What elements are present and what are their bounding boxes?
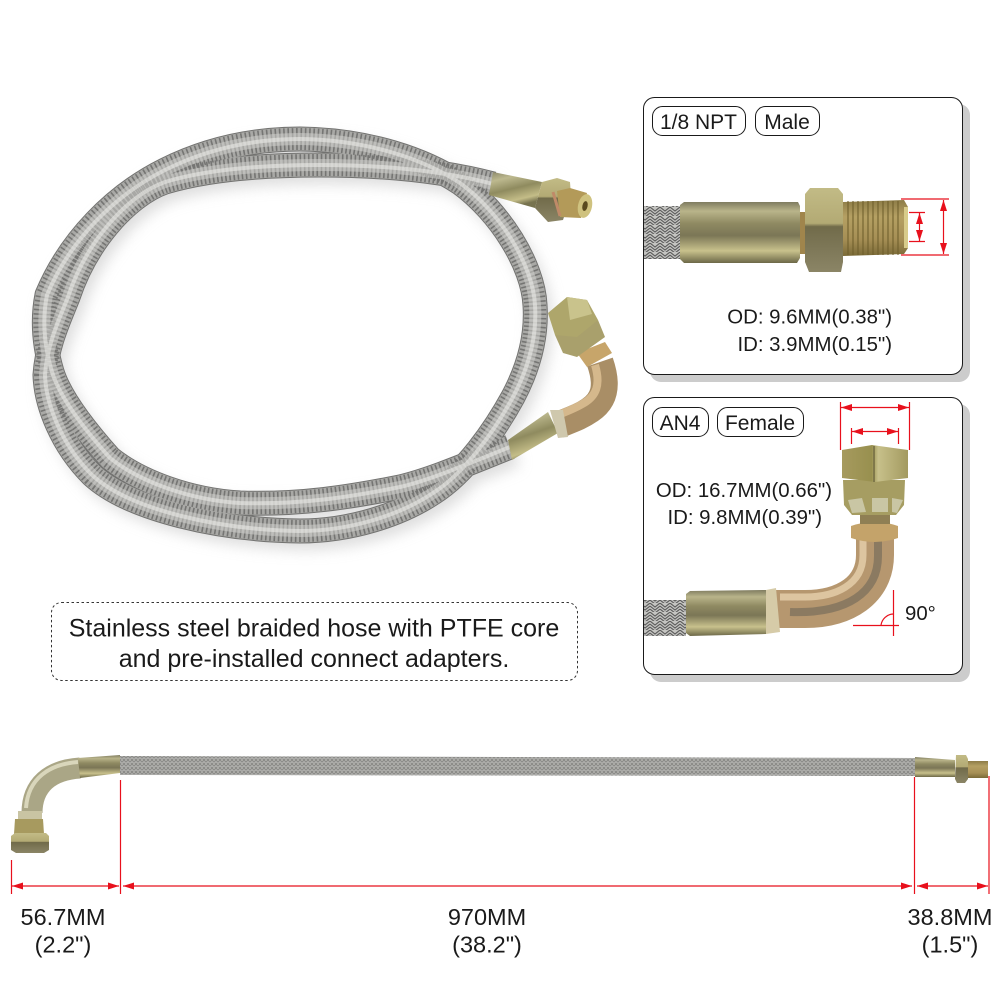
label: hose length: (38.2"): [452, 932, 522, 958]
tag: 1/8 NPT: [652, 106, 746, 136]
label: 90 degrees: 90°: [905, 603, 936, 625]
female elbow fitting photo: [644, 445, 908, 636]
panel shadow: [650, 404, 970, 682]
product photo: coiled braided hose: [44, 139, 612, 539]
panel frame: [644, 398, 962, 674]
tag: 1/8 NPT: 1/8 NPT: [660, 111, 737, 134]
dimension lines: overall length: [12, 776, 989, 894]
label: hose length: [448, 904, 526, 958]
left elbow and nut: [11, 755, 120, 853]
full-length hose photo: [11, 755, 988, 853]
label: hose length: 970MM: [448, 904, 526, 930]
tag: Female: [718, 408, 804, 436]
spec text: female: OD: 16.7MM(0.66"): [656, 480, 832, 502]
panel frame: [644, 98, 962, 374]
callout: product description: and pre-installed connect adapters.: [119, 645, 509, 673]
label: right fitting length: (1.5"): [922, 932, 978, 958]
tag: Male: Male: [764, 111, 810, 134]
tag: Male: [756, 106, 820, 136]
callout: product description: Stainless steel braided hose with PTFE core: [69, 614, 559, 642]
male fitting on coil: [489, 172, 594, 222]
panel shadow: [650, 104, 970, 382]
spec text: female: [656, 480, 832, 529]
right male fitting: [915, 755, 988, 783]
male fitting photo: [644, 188, 908, 272]
label: left fitting length: [21, 904, 105, 958]
hose coil: [44, 139, 535, 531]
label: right fitting length: [908, 904, 992, 958]
panel: female connector: [644, 398, 970, 682]
spec text: female: ID: 9.8MM(0.39"): [667, 507, 822, 529]
label: left fitting length: (2.2"): [35, 932, 91, 958]
label: right fitting length: 38.8MM: [908, 904, 992, 930]
tag: AN4: [652, 408, 708, 436]
spec text: male: [727, 306, 892, 356]
dimension arrows: male: [901, 199, 949, 255]
dimension arrows: female: [840, 402, 910, 636]
label: left fitting length: 56.7MM: [21, 904, 105, 930]
braided hose: [120, 756, 915, 776]
elbow fitting on coil: [508, 297, 612, 460]
panel: male connector: [644, 98, 970, 382]
tag: AN4: AN4: [660, 412, 701, 435]
callout: product description: [52, 602, 578, 680]
soft shadow below coil: [50, 147, 541, 539]
spec text: male: OD: 9.6MM(0.38"): [727, 306, 892, 328]
tag: Female: Female: [725, 412, 795, 435]
spec text: male: ID: 3.9MM(0.15"): [737, 334, 892, 356]
